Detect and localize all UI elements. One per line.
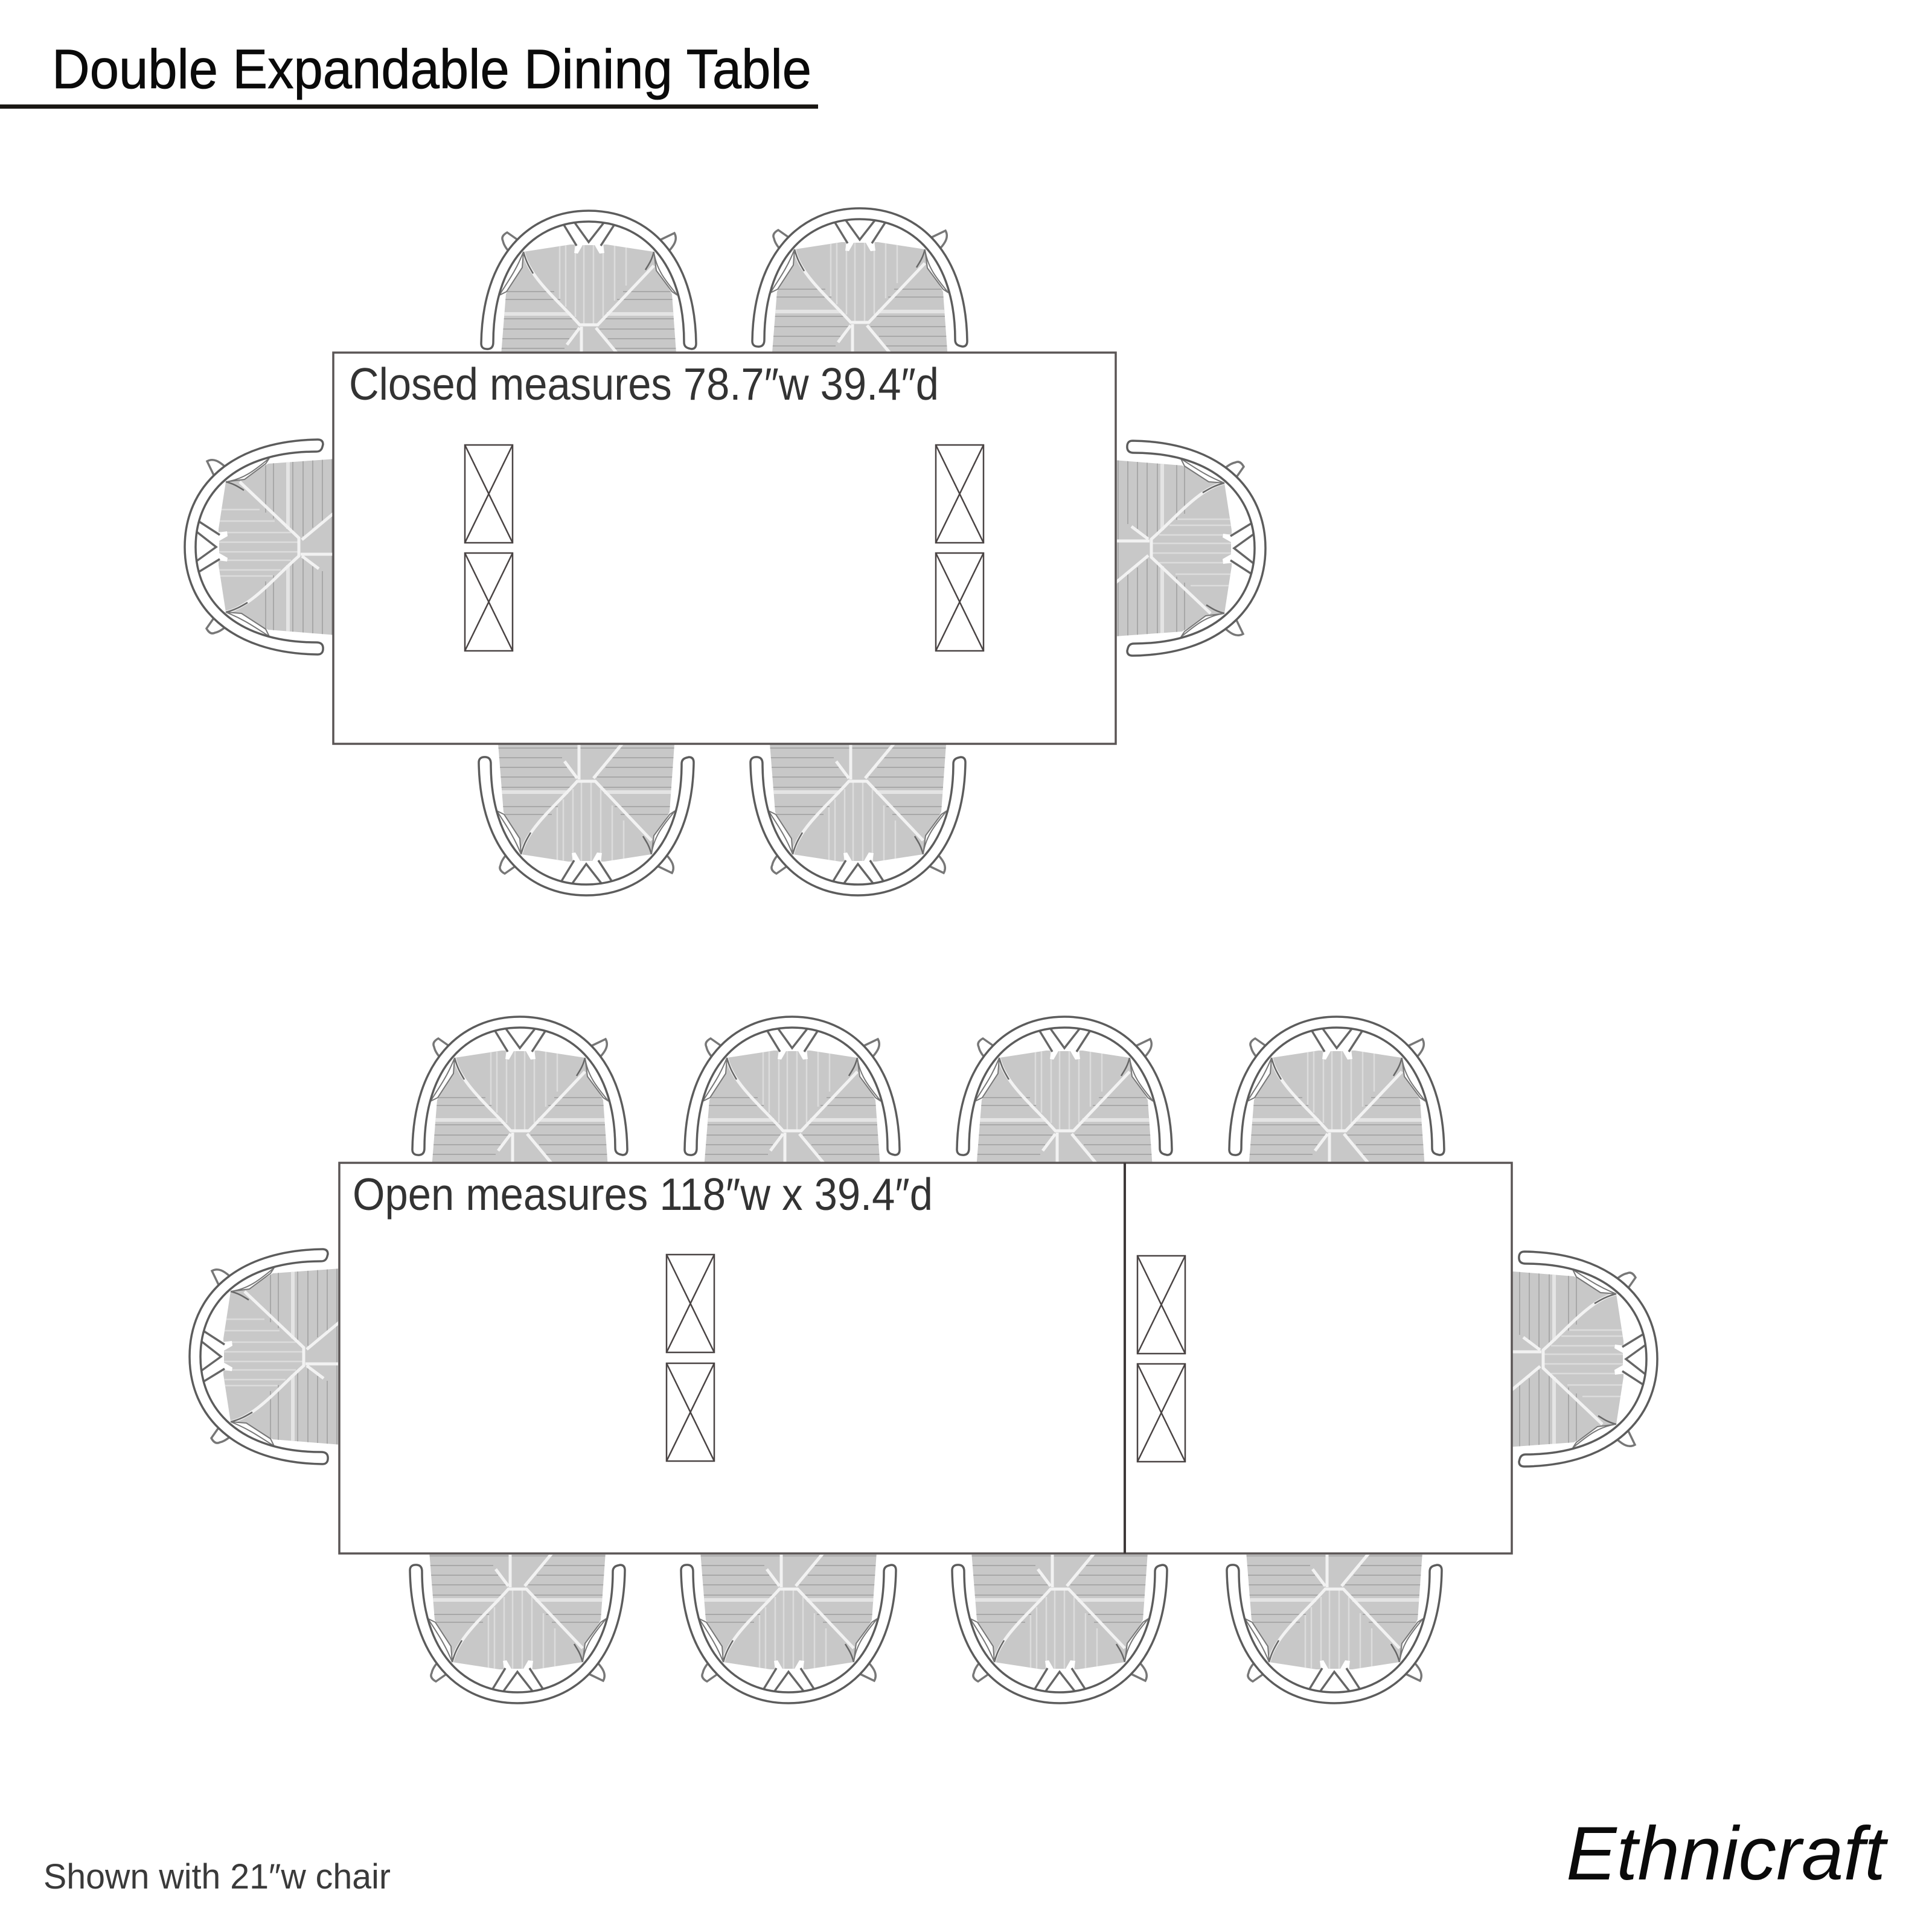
table leg: closed right upper: [936, 445, 984, 543]
closed measurements label: Closed measures 78.7″w 39.4″d: [349, 359, 939, 409]
chair: closed left end: [185, 440, 344, 654]
closed table top: [333, 353, 1116, 744]
chair: open bottom 1: [410, 1544, 625, 1703]
chair: open top 1: [412, 1017, 627, 1176]
open table top: [339, 1163, 1512, 1553]
closed configuration: chairs and table: [185, 208, 1265, 895]
table leg: open right lower: [1137, 1364, 1185, 1462]
chair: open top 4: [1229, 1017, 1444, 1176]
table leg: closed right lower: [936, 553, 984, 651]
table leg: closed left upper: [465, 445, 513, 543]
extension leaf divider: [1124, 1163, 1126, 1553]
chair footnote: Shown with 21″w chair: [43, 1857, 391, 1896]
table leg: closed left lower: [465, 553, 513, 651]
Ethnicraft logo: Ethnicraft: [1566, 1812, 1889, 1896]
chair: closed right end: [1106, 441, 1265, 656]
open measurements label: Open measures 118″w x 39.4″d: [353, 1169, 933, 1220]
open configuration: chairs and table: [190, 1017, 1657, 1703]
chair: open left end: [190, 1249, 349, 1464]
table leg: open left lower: [667, 1363, 714, 1461]
chair: open right end: [1498, 1252, 1657, 1467]
table leg: open left upper: [667, 1255, 714, 1352]
title underline: [0, 104, 818, 109]
chair: closed top 2: [752, 208, 967, 368]
chair: open top 3: [957, 1017, 1172, 1176]
chair: open bottom 3: [952, 1544, 1167, 1703]
chair: open bottom 2: [681, 1544, 896, 1703]
title: Double Expandable Dining Table: [52, 39, 811, 100]
chair: open top 2: [685, 1017, 900, 1176]
chair: open bottom 4: [1227, 1544, 1442, 1703]
table leg: open right upper: [1137, 1256, 1185, 1354]
chair: closed bottom 2: [750, 736, 965, 895]
chair: closed top 1: [481, 211, 696, 370]
chair: closed bottom 1: [479, 736, 694, 895]
